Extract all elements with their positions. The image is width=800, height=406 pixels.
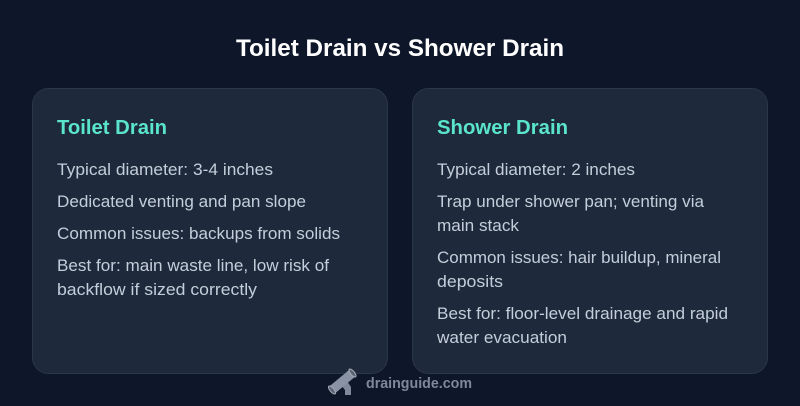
watermark logo — [327, 368, 472, 395]
text block: shower drain facts: Typical diameter: 2 inches — [437, 161, 635, 179]
text block: shower drain facts: Best for: floor-level drainage and rapid — [437, 305, 728, 323]
text block: toilet drain facts: Typical diameter: 3-4 inches — [57, 161, 273, 179]
text block: toilet drain facts: Common issues: backups from solids — [57, 225, 340, 243]
icon: pipe — [327, 368, 357, 395]
panel: toilet drain — [32, 88, 388, 374]
panel: shower drain — [412, 88, 768, 374]
watermark text: drainguide.com — [366, 376, 472, 392]
text block: shower drain facts: main stack — [437, 217, 520, 235]
text block: toilet drain facts: Dedicated venting and pan slope — [57, 193, 306, 211]
text block: shower drain facts: deposits — [437, 273, 503, 291]
text block: shower drain facts: Common issues: hair buildup, mineral — [437, 249, 721, 267]
title: Toilet Drain vs Shower Drain — [236, 35, 564, 62]
heading: shower drain: Shower Drain — [437, 116, 568, 139]
text block: shower drain facts: Trap under shower pan; venting via — [437, 193, 705, 211]
heading: toilet drain: Toilet Drain — [57, 116, 167, 139]
text block: toilet drain facts — [57, 161, 340, 299]
text block: toilet drain facts: Best for: main waste line, low risk of — [57, 257, 329, 275]
text block: shower drain facts — [436, 161, 728, 347]
text block: toilet drain facts: backflow if sized correctly — [57, 281, 258, 299]
text block: shower drain facts: water evacuation — [436, 329, 567, 347]
